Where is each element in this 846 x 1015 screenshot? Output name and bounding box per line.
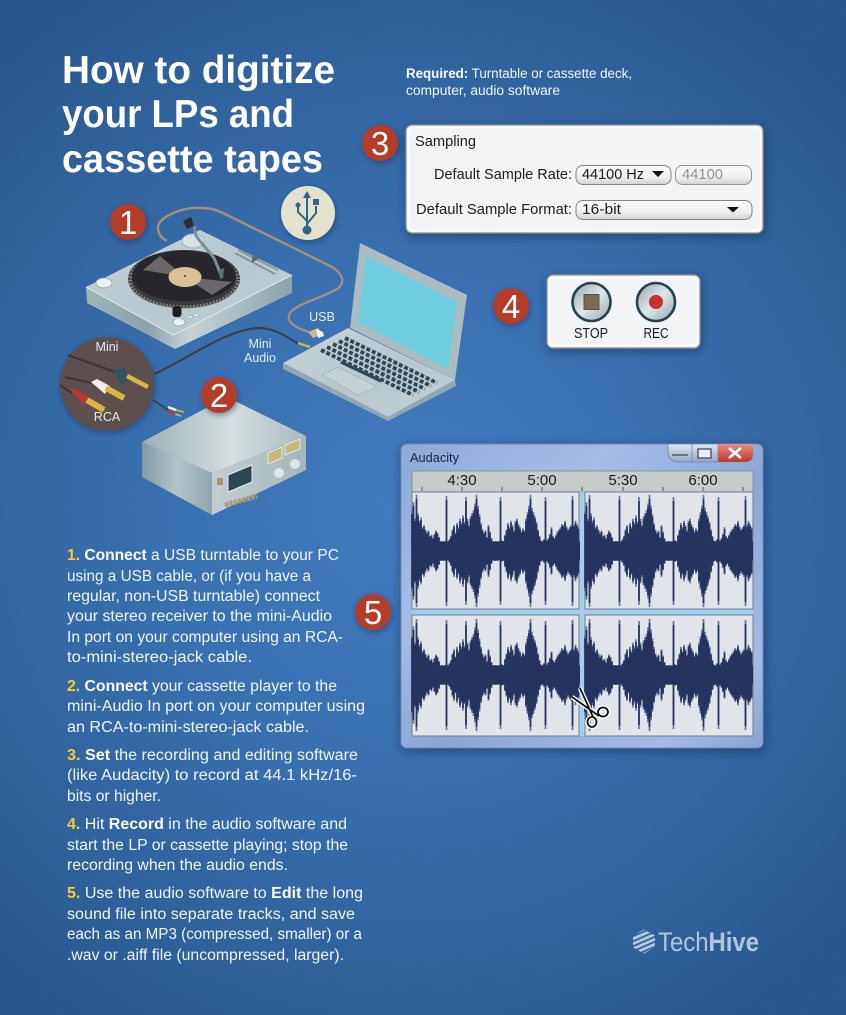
step 2 text: mini-Audio In port on your computer using bbox=[67, 698, 365, 715]
record button: REC bbox=[644, 325, 669, 342]
step 5 text bbox=[67, 885, 363, 964]
turntable body bbox=[86, 275, 292, 349]
window title: Audacity bbox=[410, 450, 459, 465]
step 1 text: regular, non-USB turntable) connect bbox=[67, 588, 321, 605]
step 2 text: an RCA-to-mini-stereo-jack cable. bbox=[67, 719, 309, 736]
cable labels: Mini bbox=[96, 340, 118, 354]
cable labels bbox=[94, 310, 335, 424]
sample rate dropdown bbox=[576, 166, 671, 184]
pitch slider bbox=[235, 250, 278, 274]
title bbox=[62, 49, 335, 181]
icon: USB symbol bbox=[281, 186, 335, 240]
step badge 5: 5 bbox=[364, 594, 382, 631]
step 3 text: (like Audacity) to record at 44.1 kHz/16- bbox=[67, 767, 357, 784]
step 2 text bbox=[67, 678, 365, 736]
required note bbox=[406, 66, 632, 98]
step 3 text: bits or higher. bbox=[67, 788, 161, 805]
icon: scissors bbox=[572, 688, 608, 727]
sample rate dropdown: 44100 Hz bbox=[582, 166, 644, 183]
step badge 2 bbox=[201, 377, 237, 414]
platter bbox=[128, 250, 240, 308]
title: cassette tapes bbox=[62, 138, 323, 181]
USB plug bbox=[308, 328, 324, 338]
timeline ruler: 6:00 bbox=[688, 472, 718, 489]
step 1 text: 1. Connect a USB turntable to your PC bbox=[67, 547, 339, 564]
title: your LPs and bbox=[62, 93, 294, 136]
selection gap bbox=[412, 492, 753, 736]
sample rate field: 44100 bbox=[682, 166, 723, 183]
controls bbox=[96, 278, 198, 326]
laptop screen bbox=[350, 243, 467, 380]
step badge 1: 1 bbox=[119, 204, 137, 241]
waveform tracks bbox=[412, 492, 753, 736]
step badge 1 bbox=[110, 204, 146, 241]
panel: record controls bbox=[547, 275, 700, 348]
cable labels: Mini bbox=[249, 337, 271, 351]
step 2 text: 2. Connect your cassette player to the bbox=[67, 678, 337, 695]
sample format dropdown: 16-bit bbox=[582, 201, 622, 218]
timeline ruler: 4:30 bbox=[447, 472, 477, 489]
mini jack plug bbox=[298, 343, 310, 347]
stop button: STOP bbox=[574, 325, 608, 342]
step 5 text: .wav or .aiff file (uncompressed, larger). bbox=[67, 947, 344, 964]
button row bbox=[225, 496, 257, 505]
TechHive logo bbox=[633, 930, 758, 954]
cable labels: Audio bbox=[244, 351, 276, 365]
step 4 text: recording when the audio ends. bbox=[67, 857, 288, 874]
step badge 4 bbox=[493, 288, 529, 325]
white RCA plug bbox=[65, 377, 124, 398]
receiver bbox=[142, 397, 306, 515]
sample rate field bbox=[676, 166, 752, 184]
step 1 text bbox=[67, 547, 343, 666]
mini plug bbox=[68, 355, 148, 387]
sampling heading: Sampling bbox=[415, 133, 476, 150]
cassette window bbox=[228, 465, 252, 492]
logo icon bbox=[633, 930, 655, 954]
laptop bbox=[283, 243, 467, 421]
cable labels: RCA bbox=[94, 410, 121, 424]
red RCA plug bbox=[60, 385, 104, 410]
timeline ruler bbox=[412, 471, 753, 492]
small cable and plugs bbox=[153, 400, 184, 416]
laptop base bbox=[283, 328, 456, 421]
step 1 text: using a USB cable, or (if you have a bbox=[67, 568, 311, 585]
trackpad bbox=[322, 367, 377, 395]
step 5 text: 5. Use the audio software to Edit the long bbox=[67, 885, 363, 902]
step 5 text: each as an MP3 (compressed, smaller) or a bbox=[67, 926, 362, 943]
step badge 3 bbox=[362, 125, 398, 162]
sample rate label: Default Sample Rate: bbox=[434, 166, 572, 183]
step 1 text: to-mini-stereo-jack cable. bbox=[67, 649, 252, 666]
step 3 text bbox=[67, 747, 358, 805]
title: How to digitize bbox=[62, 49, 335, 92]
step 5 text: sound file into separate tracks, and save bbox=[67, 906, 355, 923]
step badge 5 bbox=[355, 594, 391, 631]
panel: Audacity window bbox=[401, 444, 763, 748]
step 1 text: In port on your computer using an RCA- bbox=[67, 629, 343, 646]
panel: sampling settings bbox=[406, 125, 763, 233]
window buttons bbox=[668, 444, 753, 462]
cable labels: USB bbox=[309, 310, 335, 324]
sample format dropdown bbox=[576, 200, 752, 220]
sample format label: Default Sample Format: bbox=[416, 201, 572, 218]
connector inset bbox=[60, 337, 184, 431]
stop button bbox=[572, 283, 610, 342]
small badge bbox=[217, 478, 223, 485]
timeline ruler: 5:00 bbox=[527, 472, 557, 489]
record button bbox=[637, 283, 675, 342]
receiver body bbox=[142, 442, 212, 515]
required note: computer, audio software bbox=[406, 83, 560, 98]
step 3 text: 3. Set the recording and editing software bbox=[67, 747, 358, 764]
TechHive logo: TechHive bbox=[658, 927, 759, 957]
step badge 3: 3 bbox=[371, 125, 389, 162]
step 1 text: your stereo receiver to the mini-Audio bbox=[67, 608, 332, 625]
step 4 text: 4. Hit Record in the audio software and bbox=[67, 816, 347, 833]
tonearm bbox=[182, 217, 224, 279]
VU meters bbox=[268, 439, 300, 464]
space bar bbox=[341, 362, 381, 381]
turntable bbox=[86, 217, 292, 349]
keyboard bbox=[321, 338, 437, 395]
step 4 text: start the LP or cassette playing; stop the bbox=[67, 837, 348, 854]
knobs bbox=[274, 459, 300, 478]
timeline ruler: 5:30 bbox=[608, 472, 638, 489]
required note: Required: Turntable or cassette deck, bbox=[406, 66, 632, 81]
step 4 text bbox=[67, 816, 348, 874]
USB cable bbox=[158, 208, 342, 332]
step badge 2: 2 bbox=[210, 377, 228, 414]
mini audio cable bbox=[154, 328, 299, 374]
step badge 4: 4 bbox=[502, 288, 520, 325]
instructions text bbox=[67, 547, 365, 964]
